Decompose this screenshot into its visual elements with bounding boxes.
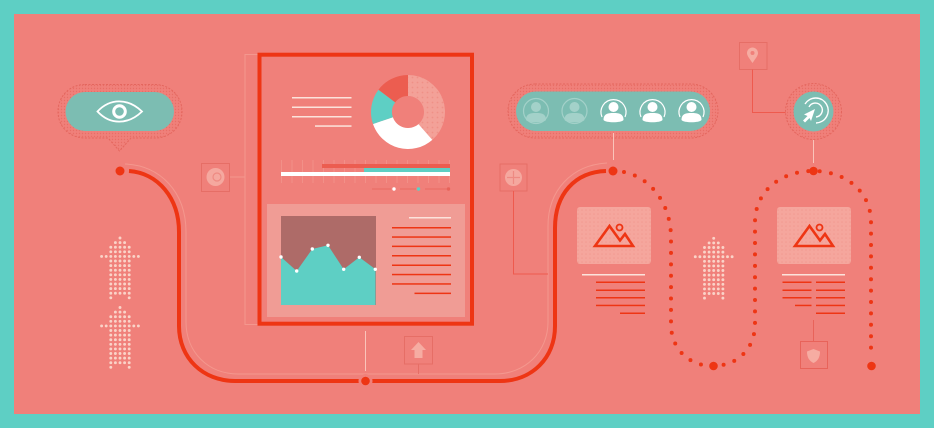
icon: mountain xyxy=(795,224,833,246)
image card two xyxy=(777,207,851,264)
icon: user faded 1 xyxy=(524,98,548,124)
icon: mountain xyxy=(595,224,633,246)
icon: target with cursor xyxy=(803,98,828,123)
users pill xyxy=(508,84,718,138)
eye speech bubble xyxy=(58,84,182,151)
chart legend xyxy=(372,187,450,191)
shield icon box xyxy=(800,320,828,368)
small donut icon box xyxy=(202,164,230,192)
bracket connector xyxy=(230,54,259,324)
target connector line xyxy=(813,140,814,163)
icon: eye xyxy=(98,101,142,122)
icon: user active 3 xyxy=(679,100,704,122)
icon: user active 2 xyxy=(640,100,665,122)
text lines: report intro xyxy=(292,97,352,127)
target badge xyxy=(786,84,842,140)
icon: user active 1 xyxy=(601,100,626,122)
icon: user faded 2 xyxy=(562,98,587,124)
image card one xyxy=(577,207,651,264)
area chart panel xyxy=(267,204,465,317)
text lines: chart notes xyxy=(392,217,451,294)
text lines: card two xyxy=(782,274,845,314)
dotted red path xyxy=(608,166,876,370)
donut chart xyxy=(371,75,445,149)
text lines: card one xyxy=(582,274,645,314)
plus icon box xyxy=(500,164,548,274)
users connector line xyxy=(613,133,614,160)
stacked bars xyxy=(281,160,450,183)
upload icon box xyxy=(404,336,432,374)
dotted arrow centre right xyxy=(695,238,732,298)
report frame xyxy=(260,55,472,324)
thick red path xyxy=(116,166,606,388)
dotted arrow left upper xyxy=(102,238,138,298)
dotted arrow left lower xyxy=(102,308,138,367)
thin outline track xyxy=(125,163,607,374)
pin icon box xyxy=(740,42,786,112)
report connector line xyxy=(365,331,366,371)
